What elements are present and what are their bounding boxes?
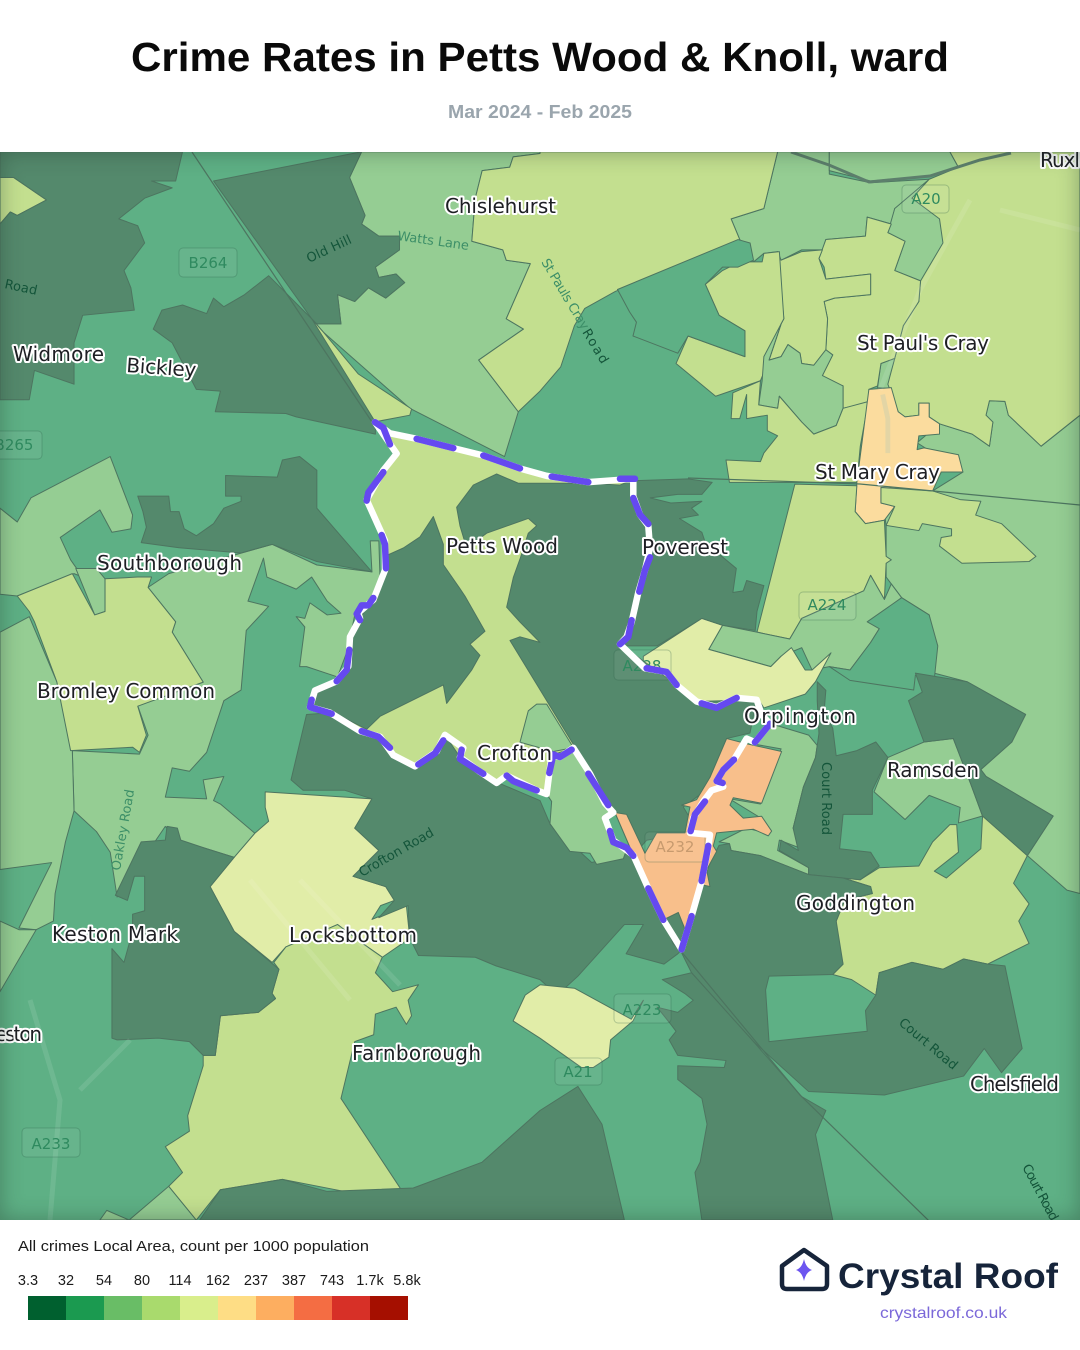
road name labels: Road <box>3 277 39 299</box>
road number signs: A232 <box>656 838 694 856</box>
map regions: north-west <box>0 152 540 930</box>
road number signs: A224 <box>808 596 846 614</box>
legend tick labels: 1.7k <box>356 1273 384 1289</box>
place name labels: St Paul's Cray <box>857 331 989 355</box>
road name labels: Court Road <box>1018 1162 1061 1224</box>
road number signs: B264 <box>189 254 227 272</box>
road name labels <box>3 229 1061 1224</box>
place name labels: St Mary Cray <box>815 460 940 484</box>
place name labels: Goddington <box>796 891 915 915</box>
legend tick labels: 3.3 <box>18 1273 38 1289</box>
panel: choropleth map <box>0 152 1080 1220</box>
road number signs: A223 <box>623 1001 661 1019</box>
place name labels: Bromley Common <box>37 679 215 703</box>
legend tick labels: 162 <box>206 1273 230 1289</box>
road name labels: St Pauls Cray <box>538 256 592 333</box>
map regions: Petts Wood ward interior <box>310 422 782 951</box>
road name labels: Crofton Road <box>356 825 437 880</box>
road name labels: Old Hill <box>304 233 354 267</box>
legend title: All crimes Local Area, count per 1000 population <box>18 1239 369 1255</box>
road name labels: Watts Lane <box>396 229 470 254</box>
map regions: north-east <box>472 152 1080 894</box>
place name labels: Farnborough <box>352 1041 481 1065</box>
place name labels: Locksbottom <box>289 923 417 947</box>
legend tick labels: 5.8k <box>393 1273 421 1289</box>
place name labels: Widmore <box>13 342 104 366</box>
legend tick labels: 80 <box>134 1273 150 1289</box>
logo wordmark: Crystal Roof <box>838 1257 1058 1296</box>
legend tick labels <box>18 1273 421 1289</box>
road number signs: A228 <box>623 657 661 675</box>
legend tick labels: 114 <box>168 1273 192 1289</box>
legend tick labels: 54 <box>96 1273 112 1289</box>
place name labels: Crofton <box>477 741 552 765</box>
place name labels <box>0 148 1080 1096</box>
place name labels: Bickley <box>126 353 197 382</box>
subtitle: Mar 2024 - Feb 2025 <box>448 102 632 122</box>
place name labels: Orpington <box>744 704 856 728</box>
place name labels: Keston Mark <box>52 922 178 946</box>
icon: house with star <box>782 1250 827 1289</box>
road name labels: Road <box>579 326 611 367</box>
road number signs <box>0 185 949 1157</box>
title: Crime Rates in Petts Wood & Knoll, ward <box>131 34 949 80</box>
legend tick labels: 237 <box>244 1273 268 1289</box>
legend tick labels: 387 <box>282 1273 306 1289</box>
logo url: crystalroof.co.uk <box>880 1305 1008 1322</box>
place name labels: Chelsfield <box>970 1072 1059 1096</box>
logo: Crystal Roof <box>780 1248 1058 1322</box>
road name labels: Oakley Road <box>109 788 138 872</box>
map edge vignette <box>0 152 1080 1220</box>
road number signs: A233 <box>32 1135 70 1153</box>
road name labels: Court Road <box>895 1016 960 1073</box>
ward boundary: Petts Wood & Knoll <box>310 422 770 949</box>
legend tick labels: 32 <box>58 1273 74 1289</box>
place name labels: Poverest <box>642 535 728 559</box>
road name labels: Court Road <box>818 762 833 835</box>
legend tick labels: 743 <box>320 1273 344 1289</box>
map regions: south-east <box>200 673 1053 1220</box>
place name labels: Petts Wood <box>446 534 558 558</box>
road number signs: A20 <box>911 190 941 208</box>
legend colour scale <box>28 1296 408 1320</box>
panel: legend <box>18 1239 421 1320</box>
place name labels: Ramsden <box>887 758 979 782</box>
panel: title header <box>0 0 1080 152</box>
place name labels: Southborough <box>97 551 242 575</box>
road number signs: A21 <box>563 1063 593 1081</box>
map regions: south-west <box>0 713 681 1220</box>
place name labels: Chislehurst <box>445 194 556 218</box>
